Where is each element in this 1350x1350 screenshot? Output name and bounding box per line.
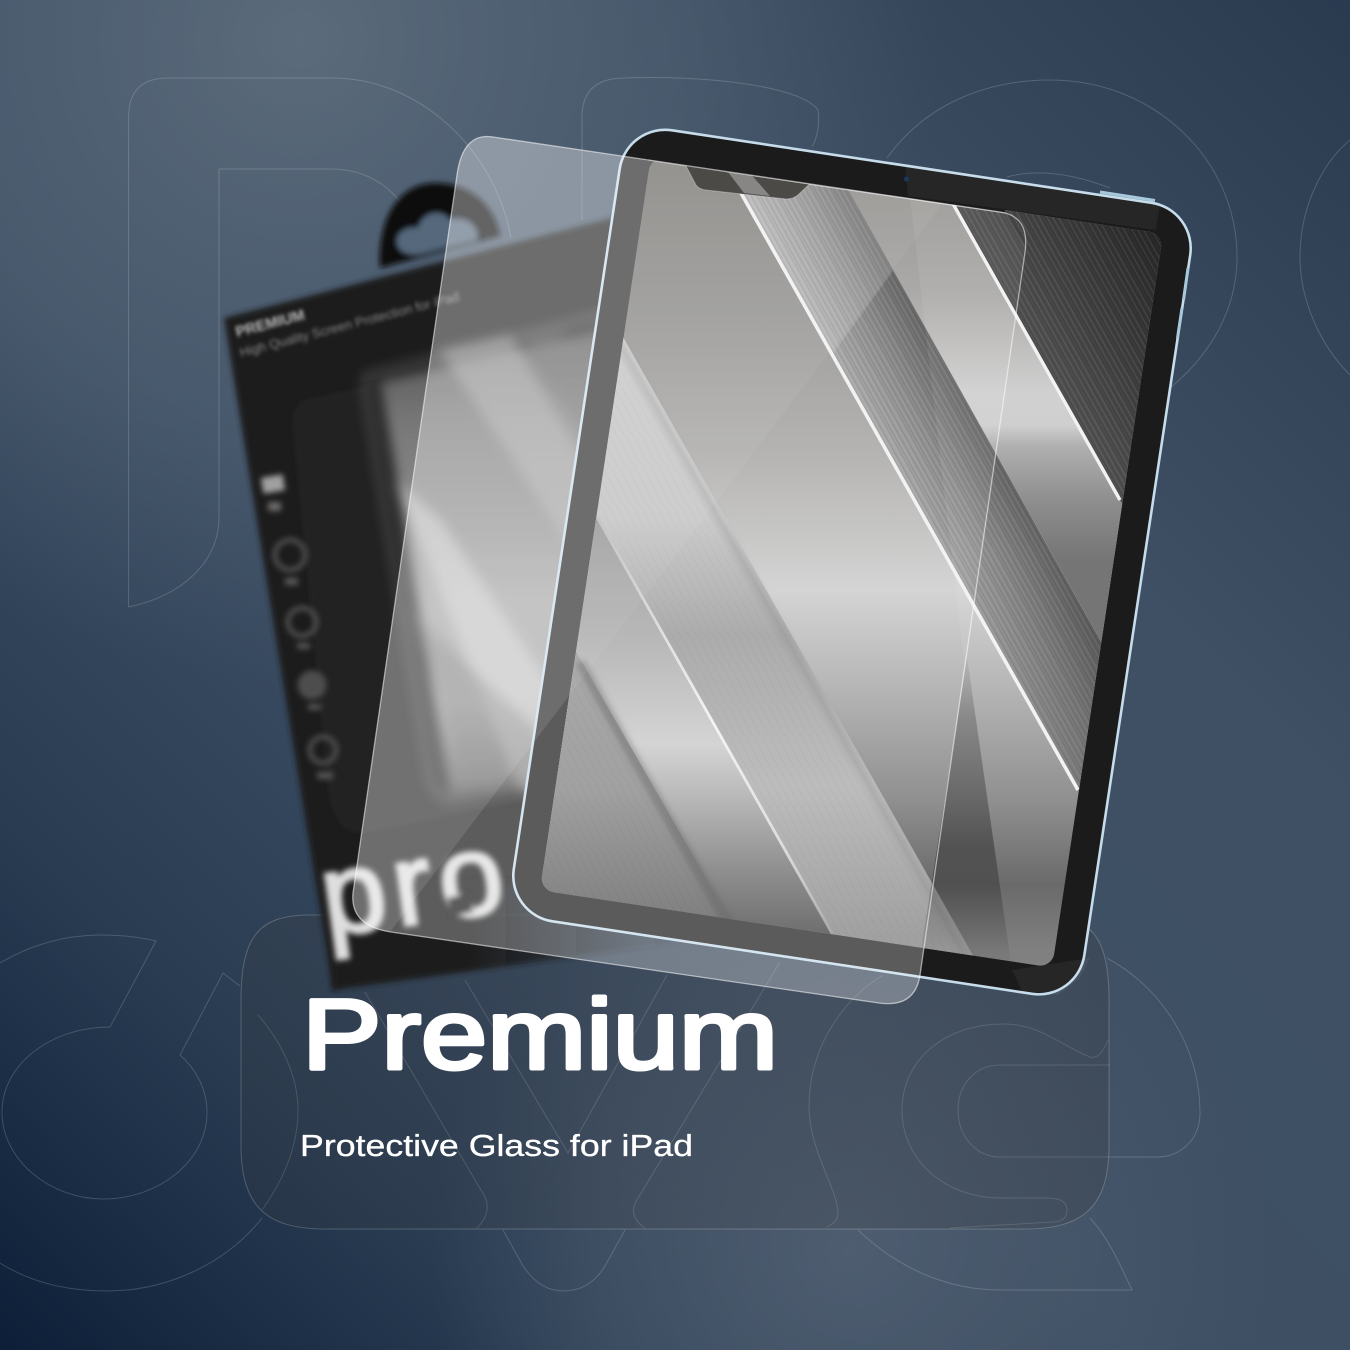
product box (blurred) (224, 183, 860, 990)
screen: light brushed fold band (542, 338, 974, 956)
blurred logo on box: pro (313, 808, 519, 961)
bezel reflection lower right (1012, 958, 1090, 995)
decorative line art: upper background curves (129, 77, 1350, 607)
tablet body (507, 123, 1197, 1001)
glass upper-left reflection (353, 137, 654, 932)
screen: brushed diagonal band (744, 176, 1102, 792)
box body and hang tab (224, 183, 860, 990)
blurred tablet artwork on box (366, 305, 660, 820)
box bottom fade (333, 880, 700, 990)
box feature icons (261, 474, 336, 779)
box heading text: PREMIUM (234, 307, 307, 341)
glass notch (648, 160, 1005, 213)
glass protector: body over bezel and background (352, 136, 924, 1004)
frosted card (241, 915, 1109, 1229)
screen: bright sheen section (548, 517, 831, 934)
tablet screen artwork (542, 162, 1162, 966)
screen: white diagonal lines (597, 170, 1120, 935)
tablet side buttons (1100, 192, 1188, 338)
screen: dark reflection wedge (922, 660, 1009, 955)
bezel shade under glass (507, 123, 1197, 1001)
front camera (904, 164, 1160, 230)
bezel strip above glass (636, 143, 1005, 212)
subtitle: Protective Glass for iPad (300, 1128, 693, 1163)
screen: glass reflections (910, 200, 1025, 554)
glass protector edge (353, 136, 1026, 1004)
decorative line art: lower background curves (0, 935, 1200, 1291)
screen: middle light band (852, 193, 1122, 642)
screen: dark brushed corner (956, 205, 1161, 504)
screen: lower-left brushed section (544, 652, 727, 918)
title: Premium (302, 978, 778, 1090)
box heading text: High Quality Screen Protection for iPad (238, 289, 461, 360)
box window outline (294, 325, 660, 831)
